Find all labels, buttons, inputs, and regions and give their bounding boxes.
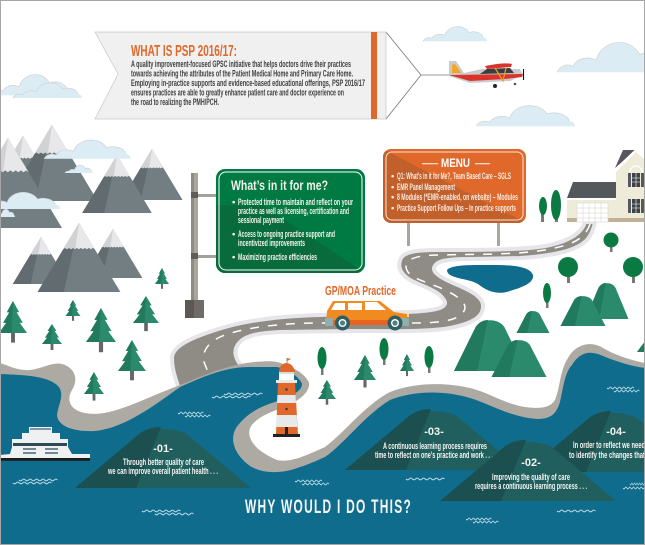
panel: what's in it for me [216,169,365,273]
round and oval trees [318,190,643,375]
panel: hill 01 [75,427,251,488]
menu list: • [391,192,395,203]
sea [0,353,645,545]
banner heading: WHAT IS PSP 2016/17: [131,43,237,60]
road [172,222,595,392]
banner body text: A quality improvement-focused GPSC initiative that helps doctors drive their practices [131,59,351,69]
sea waves [13,387,645,523]
heading: why would I do this: WHY WOULD I DO THIS? [245,497,412,518]
panel: hill 03 [345,409,521,470]
banner body text [131,59,365,107]
text 01: Through better quality of care [123,457,204,467]
icon: ferry [0,427,90,461]
menu list: Practice Support Follow Ups – In practice supports [397,203,516,214]
text 01: we can improve overall patient health . . . [107,466,218,476]
banner body text: the road to realizing the PMH/PCH. [131,97,219,107]
icon: lighthouse [273,358,300,437]
garage [566,182,616,222]
menu list: 8 Modules (*EMR-enabled, on website) – Modules [397,192,518,203]
tow lines [386,32,450,119]
main house [613,150,645,222]
menu list: EMR Panel Management [397,182,455,193]
green hills [454,283,645,377]
heading: what's in it for me: What’s in it for me? [231,178,328,193]
cloud below plane [476,106,575,126]
icon: orange car [325,301,409,330]
cloud right [557,42,645,72]
panel: menu [383,149,526,223]
banner body text: towards achieving the attributes of the Patient Medical Home and Primary Care Home. [131,68,353,78]
icon: airplane [449,61,524,88]
number 03: -03- [424,426,444,438]
number 02: -02- [521,457,541,469]
menu sign posts [407,223,500,246]
panel: hill 02 [440,440,616,501]
banner body text: ensures practices are able to greatly enhance patient care and doctor experience on [131,88,344,98]
house [566,150,645,222]
text 03 [375,441,493,460]
text 03: time to reflect on one’s practice and work . . . [375,450,493,460]
menu list: • [391,182,395,193]
text 04 [569,440,645,460]
benefits list: Protected time to maintain and reflect on your [238,197,353,208]
heading: menu [422,156,490,170]
pine trees forest [0,268,414,405]
text 02 [475,472,587,491]
benefits list: incentivized improvements [238,238,305,249]
panel: banner what is PSP [95,32,386,119]
label: GP/MOA practice: GP/MOA Practice [325,284,396,298]
green sign post [185,173,216,318]
benefits list: sessional payment [238,215,284,226]
menu list: • [391,171,395,182]
benefits list: • [232,252,236,263]
menu list: Q1: What’s in it for Me?, Team Based Care – SGLS [397,171,511,182]
mountains lower group [13,223,142,292]
benefits list [232,197,353,263]
number 01: -01- [153,443,173,455]
benefits list: Maximizing practice efficiencies [238,252,317,263]
text 02: Improving the quality of care [492,472,570,482]
text 01 [107,457,218,476]
menu list [391,171,518,214]
benefits list: • [232,229,236,240]
banner body text: Employing in-practice supports and evidence-based educational offerings, PSP 2016/17 [131,78,365,88]
mountains upper group [0,125,183,228]
text 03: A continuous learning process requires [383,441,487,451]
cloud top left [0,75,82,98]
menu list: • [391,203,395,214]
cloud top centre [423,27,487,41]
panel: hill 04 [525,411,645,472]
benefits list: • [232,197,236,208]
benefits list: practice as well as licensing, certification and [238,206,349,217]
benefits list: Access to ongoing practice support and [238,229,335,240]
heading: menu: MENU [441,156,470,170]
sand shoreline [0,344,645,545]
lake [447,265,533,293]
number 04: -04- [606,426,626,438]
